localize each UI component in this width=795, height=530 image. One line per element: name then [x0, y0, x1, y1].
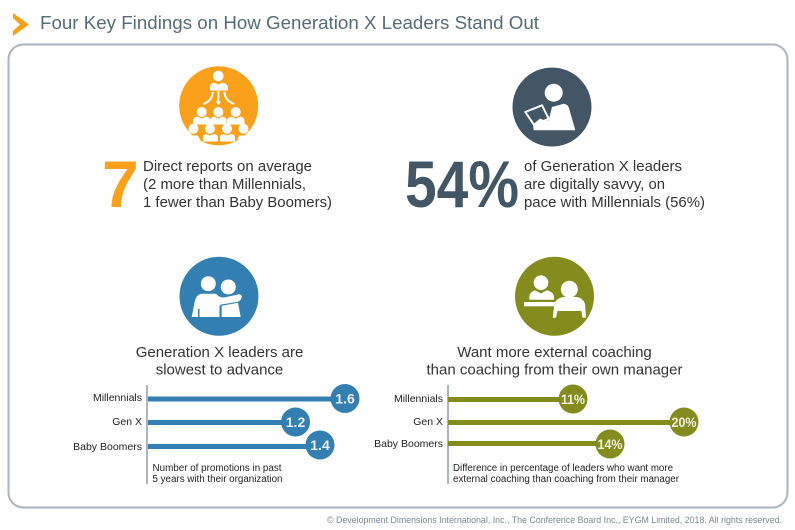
row: Millennials: Millennials	[93, 392, 142, 404]
heading: slowest to advance: Generation X leaders are	[136, 344, 303, 361]
heading: external coaching: Want more external coaching	[457, 344, 652, 361]
row: Millennials	[93, 384, 360, 413]
row: Gen X: 1.2	[286, 414, 305, 430]
text: direct reports: Direct reports on average	[143, 159, 312, 175]
row: Gen X: 20%	[672, 415, 696, 430]
text: digitally savvy: of Generation X leaders	[524, 159, 682, 175]
chart note	[152, 463, 282, 485]
chart note: Number of promotions in past	[152, 463, 282, 474]
row: Baby Boomers: 1.4	[310, 437, 330, 453]
big number: 7: 7	[102, 147, 139, 221]
chart note: Difference in percentage of leaders who want more	[453, 463, 673, 474]
row: Gen X: Gen X	[112, 416, 142, 428]
row: Millennials: 11%	[561, 392, 585, 407]
row: Millennials: 1.6	[335, 390, 355, 406]
icon: person with tablet	[512, 68, 592, 146]
chart note: external coaching than coaching from their manager	[453, 474, 680, 485]
text: digitally savvy: pace with Millennials (56%)	[524, 195, 705, 211]
row: Baby Boomers: Baby Boomers	[73, 441, 142, 453]
row: Baby Boomers	[73, 430, 334, 460]
icon: two colleagues	[180, 257, 258, 336]
text: digitally savvy: are digitally savvy, on	[524, 177, 665, 193]
big number: 54%: 54%	[405, 147, 519, 221]
text: direct reports	[143, 159, 332, 211]
chart: promotions	[73, 384, 360, 485]
row: Baby Boomers	[374, 430, 624, 458]
row: Gen X: Gen X	[413, 416, 443, 428]
heading: external coaching	[427, 344, 682, 378]
text: direct reports: (2 more than Millennials,	[143, 177, 306, 193]
text: digitally savvy	[524, 159, 705, 211]
heading: slowest to advance	[136, 344, 303, 378]
title: Four Key Findings on How Generation X Leaders Stand Out	[40, 13, 539, 33]
row: Millennials	[394, 384, 588, 414]
row: Baby Boomers: Baby Boomers	[374, 438, 443, 450]
row: Gen X	[413, 408, 698, 436]
text: direct reports: 1 fewer than Baby Boomers)	[143, 195, 332, 211]
chart: external coaching	[374, 384, 698, 485]
heading: slowest to advance: slowest to advance	[156, 362, 283, 378]
chart note: 5 years with their organization	[152, 474, 282, 485]
row: Baby Boomers: 14%	[598, 437, 622, 452]
row: Millennials: Millennials	[394, 393, 443, 405]
heading: external coaching: than coaching from their own manager	[427, 362, 682, 378]
chart note	[453, 463, 680, 485]
icon: title chevron	[13, 13, 29, 36]
row: Gen X	[112, 408, 310, 436]
icon: coaching	[515, 257, 594, 336]
icon: org hierarchy	[179, 66, 258, 145]
